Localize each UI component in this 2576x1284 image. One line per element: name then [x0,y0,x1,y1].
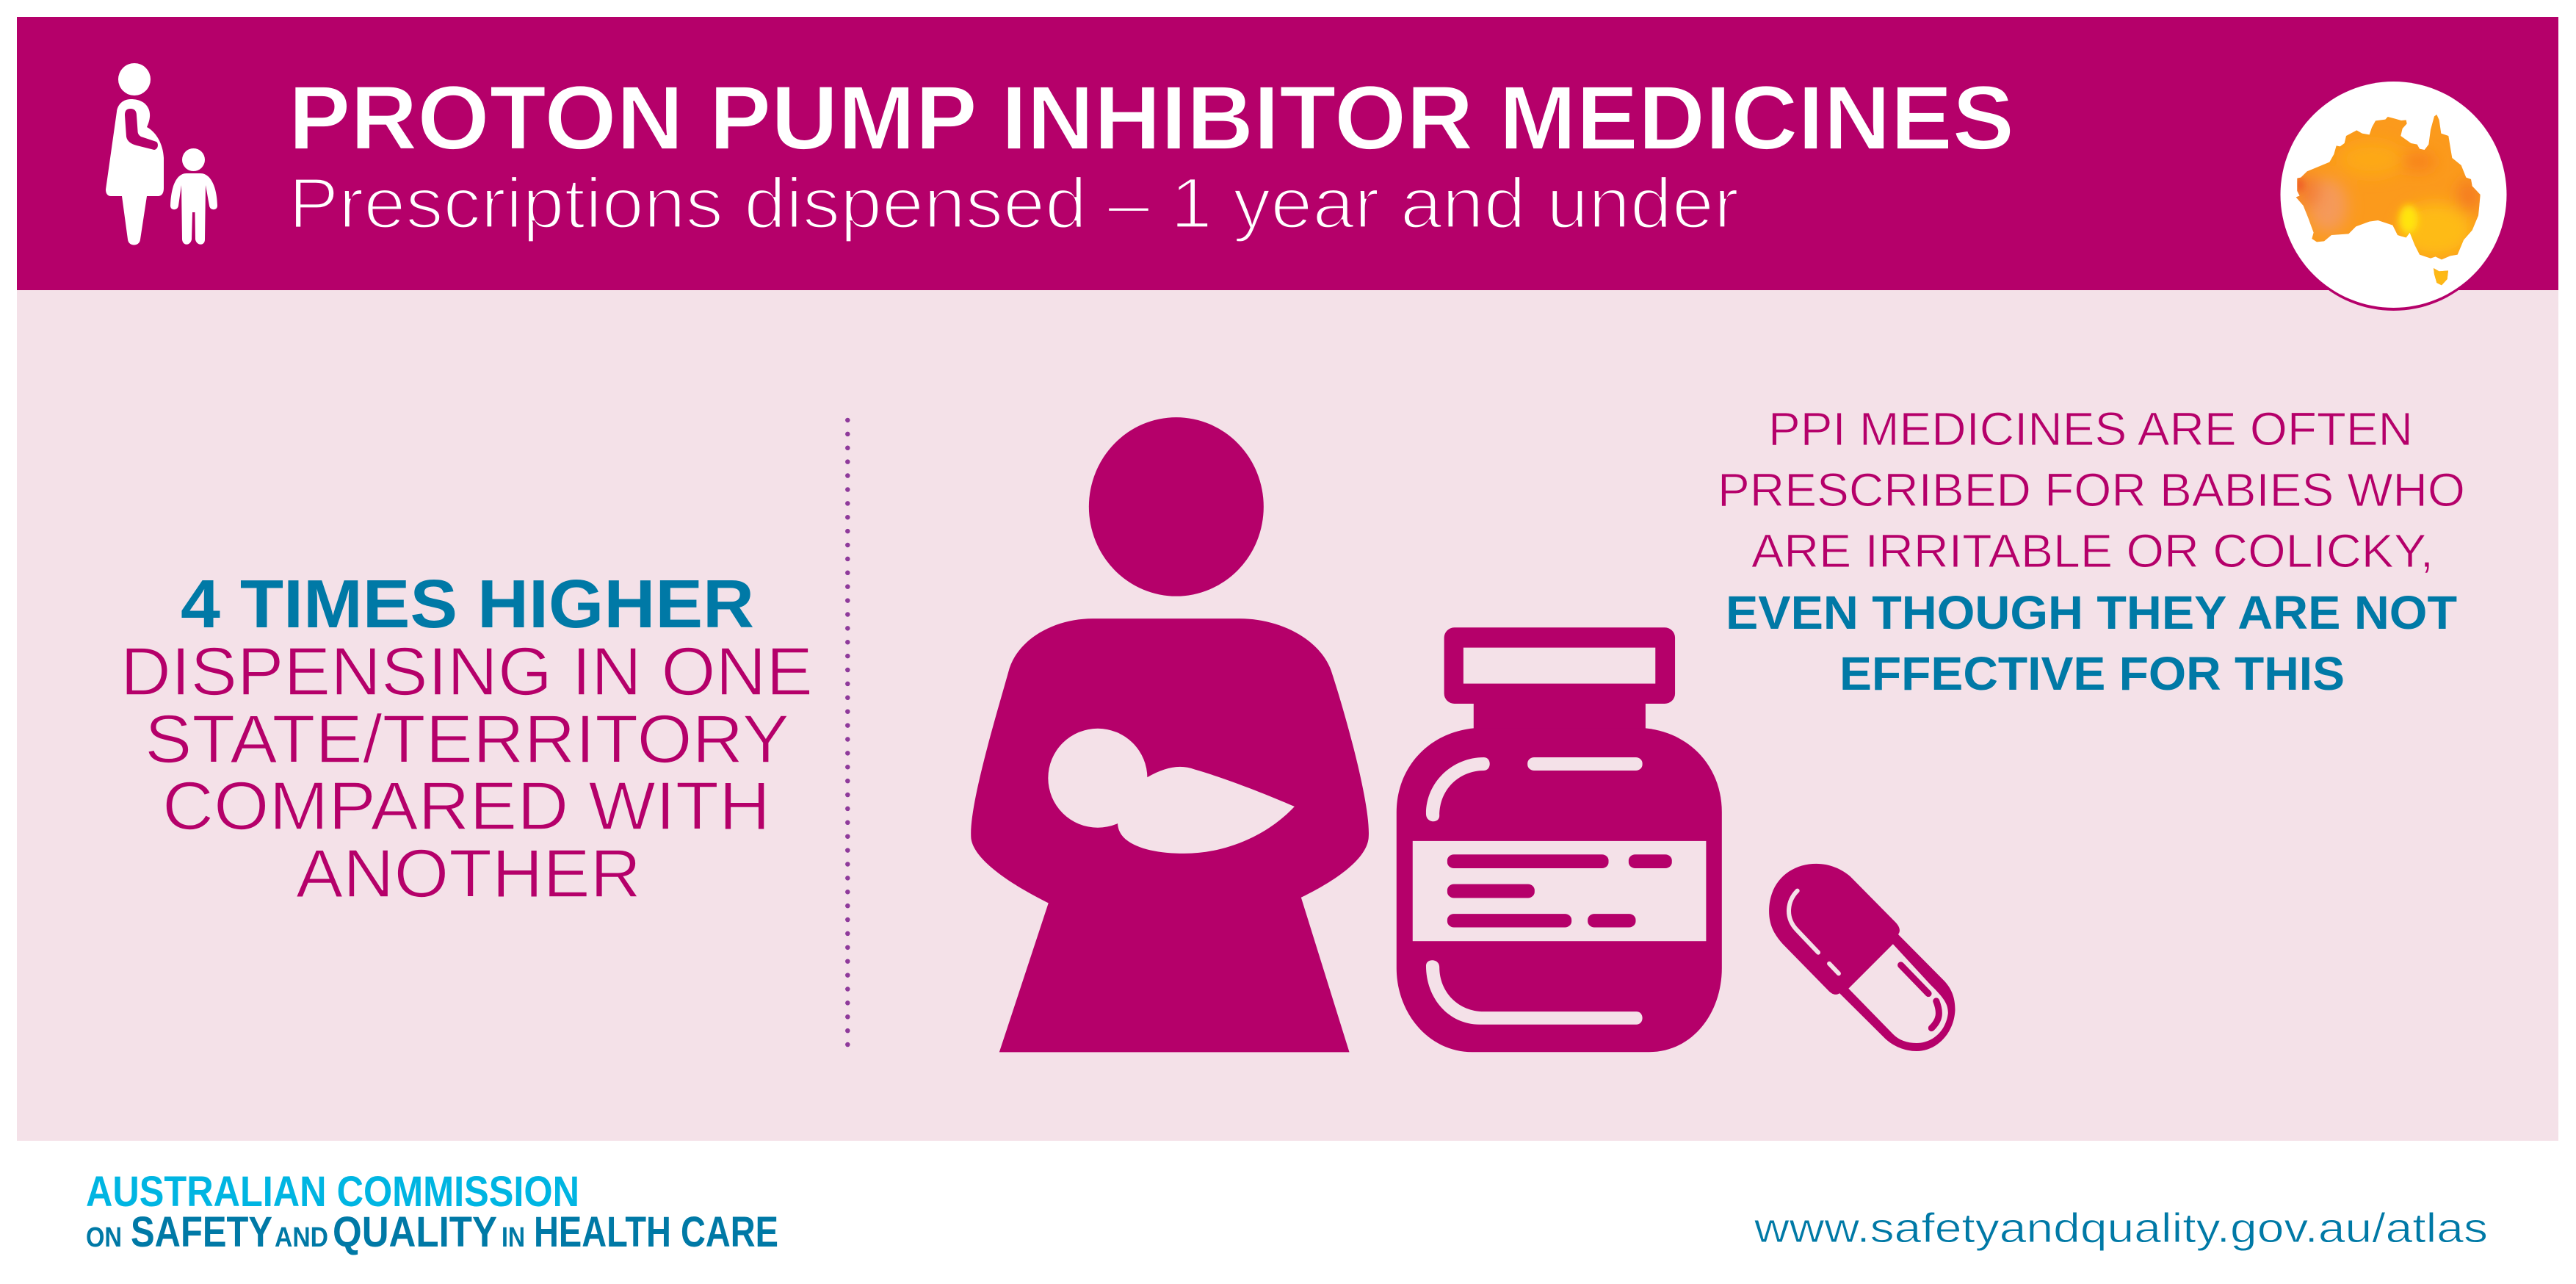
explanation in teal: EVEN THOUGH THEY ARE NOT [1726,586,2457,639]
statistic description [120,633,813,912]
explanation in magenta: ARE IRRITABLE OR COLICKY, [1751,524,2434,577]
logo: Australian Commission on Safety and Quality in Health Care: QUALITY [333,1208,497,1256]
logo: Australian Commission on Safety and Quality in Health Care: AUSTRALIAN COMMISSION [86,1168,579,1216]
divider: dotted line [845,420,850,1045]
explanation in magenta: PRESCRIBED FOR BABIES WHO [1718,464,2465,516]
statistic headline: 4 TIMES HIGHER [181,566,754,642]
icon: baby [1048,729,1295,854]
icon: medicine bottle [1397,627,1722,1052]
explanation in magenta: PPI MEDICINES ARE OFTEN [1768,403,2413,455]
logo: Australian Commission on Safety and Quality in Health Care [86,1168,778,1256]
title: PROTON PUMP INHIBITOR MEDICINES [289,68,2014,169]
logo: Australian Commission on Safety and Quality in Health Care: AND [275,1222,328,1253]
statistic description: COMPARED WITH [162,768,770,844]
bottle highlights [1426,757,1643,1025]
logo: Australian Commission on Safety and Quality in Health Care: HEALTH CARE [534,1208,778,1256]
explanation in magenta [1718,403,2465,577]
logo: Australian Commission on Safety and Quality in Health Care: IN [502,1222,525,1253]
header band [17,17,2558,290]
subtitle: Prescriptions dispensed – 1 year and under [289,163,1739,243]
website URL: www.safetyandquality.gov.au/atlas [1754,1205,2488,1252]
bottle label [1413,841,1706,941]
icon: pregnant woman and child [106,63,217,245]
statistic text block [120,566,813,912]
icon: Australia map badge [2281,82,2507,311]
body panel [17,290,2558,1141]
icon: mother holding baby [971,417,1369,1052]
explanation in teal: EFFECTIVE FOR THIS [1839,647,2345,700]
logo: Australian Commission on Safety and Quality in Health Care: SAFETY [131,1208,272,1256]
statistic description: ANOTHER [296,835,641,912]
explanatory text block [1718,403,2465,700]
logo: Australian Commission on Safety and Quality in Health Care: ON [86,1222,122,1253]
statistic description: STATE/TERRITORY [145,701,789,777]
icon: capsule pill [1769,864,1955,1051]
explanation in teal [1726,586,2457,700]
statistic description: DISPENSING IN ONE [120,633,813,710]
